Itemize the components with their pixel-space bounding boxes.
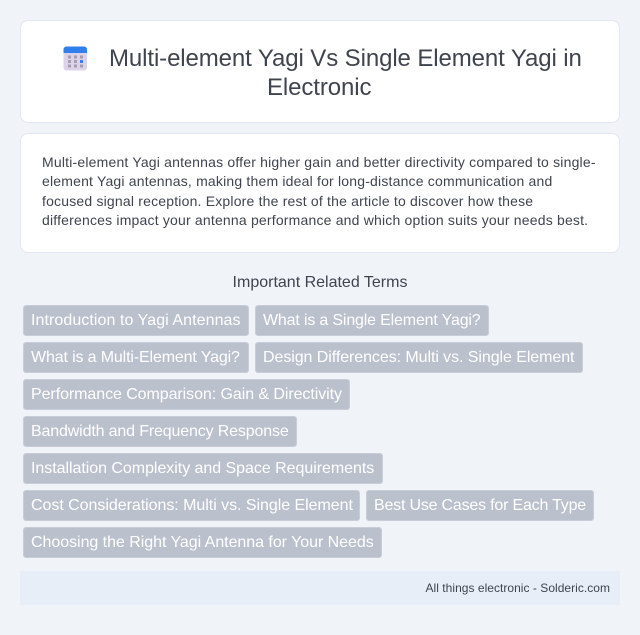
tag: What is a Single Element Yagi? — [263, 312, 481, 329]
title: Electronic — [267, 74, 371, 101]
summary text: differences impact your antenna performance and which option suits your needs best. — [42, 212, 588, 228]
tag — [23, 379, 350, 410]
tag — [255, 342, 583, 373]
summary text: element Yagi antennas, making them ideal for long-distance communication and — [42, 173, 552, 189]
footer bar — [20, 571, 620, 605]
tag: Introduction to Yagi Antennas — [31, 312, 241, 329]
tag — [366, 490, 594, 521]
heading: related terms: Important Related Terms — [233, 274, 407, 291]
tag: Choosing the Right Yagi Antenna for Your Needs — [31, 534, 374, 551]
panel: summary card — [20, 133, 620, 253]
summary text: Multi-element Yagi antennas offer higher gain and better directivity compared to single- — [42, 154, 596, 170]
icon: calendar — [64, 46, 87, 70]
tag: Best Use Cases for Each Type — [374, 497, 586, 514]
tag — [23, 416, 297, 447]
title — [109, 45, 582, 101]
tag: Cost Considerations: Multi vs. Single Element — [31, 497, 353, 514]
tag — [255, 305, 489, 336]
footer text: All things electronic - Solderic.com — [426, 581, 610, 595]
tag — [23, 453, 383, 484]
tag: Performance Comparison: Gain & Directivity — [31, 386, 342, 403]
summary text: focused signal reception. Explore the rest of the article to discover how these — [42, 193, 533, 209]
tag: What is a Multi-Element Yagi? — [31, 349, 240, 366]
tag: Design Differences: Multi vs. Single Element — [263, 349, 574, 366]
tag list — [23, 305, 594, 558]
tag — [23, 342, 249, 373]
tag: Installation Complexity and Space Requirements — [31, 460, 374, 477]
summary text — [42, 154, 596, 228]
panel: title card — [20, 20, 620, 123]
tag: Bandwidth and Frequency Response — [31, 423, 289, 440]
tag — [23, 305, 249, 336]
title: Multi-element Yagi Vs Single Element Yagi in — [109, 45, 582, 72]
tag — [23, 527, 382, 558]
tag — [23, 490, 360, 521]
